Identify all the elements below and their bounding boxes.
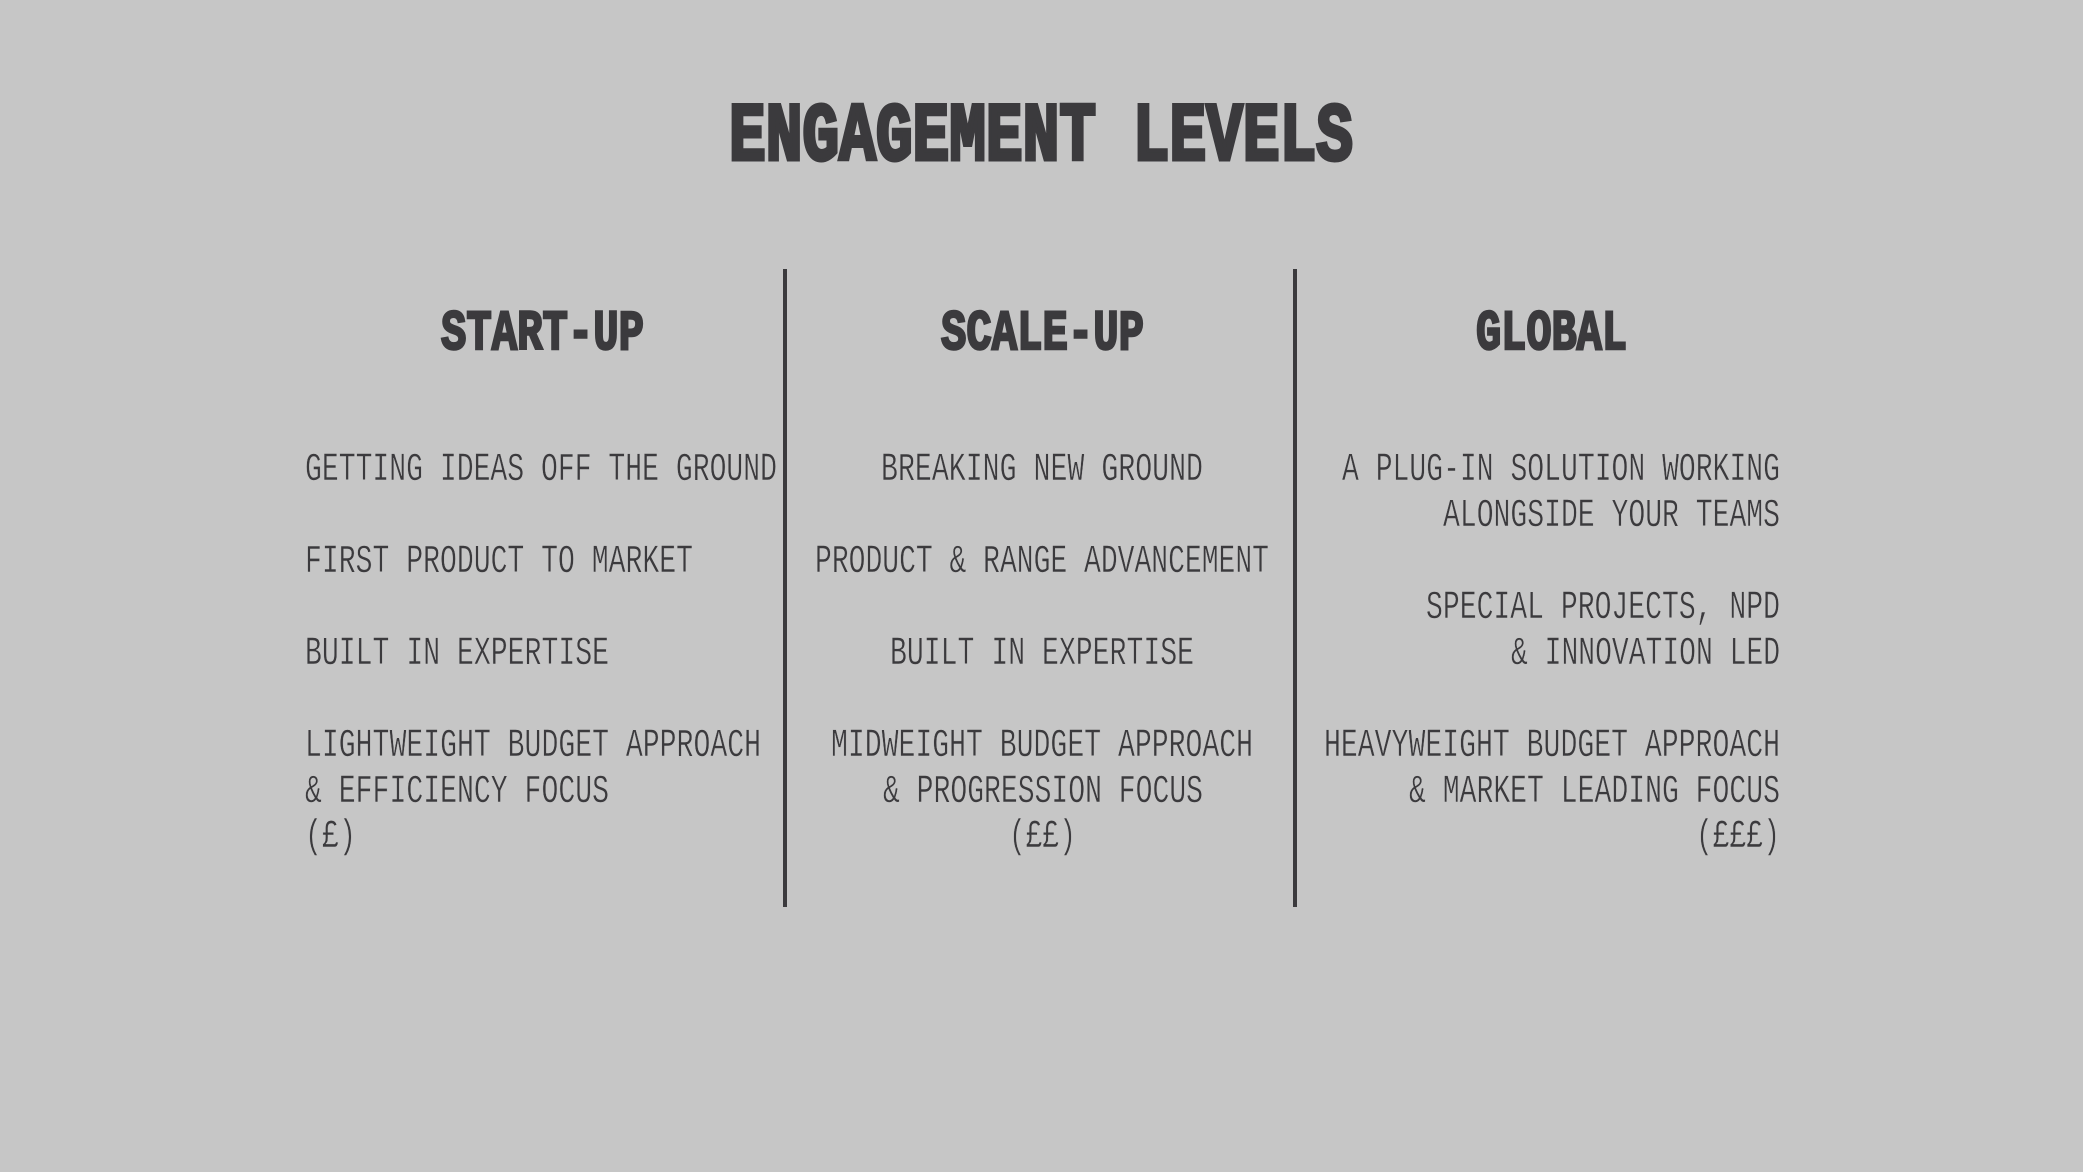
panel: scale-up xyxy=(815,303,1269,860)
divider: left xyxy=(783,269,787,907)
heading: global: GLOBAL xyxy=(1476,303,1627,367)
panel: global xyxy=(1324,303,1780,860)
text: breaking new ground: BREAKING NEW GROUND xyxy=(881,448,1203,493)
text: lightweight budget approach: LIGHTWEIGHT BUDGET APPROACH xyxy=(305,724,761,769)
text: midweight budget approach: MIDWEIGHT BUDGET APPROACH xyxy=(831,724,1253,769)
text: lightweight budget approach xyxy=(305,724,761,860)
text: built in expertise: BUILT IN EXPERTISE xyxy=(305,632,609,677)
text: heavyweight budget approach: (£££) xyxy=(1696,815,1780,860)
divider: right xyxy=(1293,269,1297,907)
text: getting ideas off the ground: GETTING IDEAS OFF THE GROUND xyxy=(305,448,777,493)
text: heavyweight budget approach: HEAVYWEIGHT BUDGET APPROACH xyxy=(1324,724,1780,769)
text: lightweight budget approach: & EFFICIENCY FOCUS xyxy=(305,770,609,815)
text: built in expertise: BUILT IN EXPERTISE xyxy=(890,632,1194,677)
text: plug-in solution: ALONGSIDE YOUR TEAMS xyxy=(1443,494,1780,539)
text: heavyweight budget approach: & MARKET LEADING FOCUS xyxy=(1409,770,1780,815)
text: midweight budget approach: (££) xyxy=(1009,815,1076,860)
text: midweight budget approach: & PROGRESSION FOCUS xyxy=(883,770,1203,815)
text: midweight budget approach xyxy=(831,724,1253,860)
title: ENGAGEMENT LEVELS xyxy=(729,90,1353,184)
text: plug-in solution: A PLUG-IN SOLUTION WORKING xyxy=(1342,448,1780,493)
text: plug-in solution xyxy=(1342,448,1780,539)
text: first product to market: FIRST PRODUCT TO MARKET xyxy=(305,540,693,585)
text: lightweight budget approach: (£) xyxy=(305,815,356,860)
panel: start-up xyxy=(305,303,777,860)
heading: start-up: START-UP xyxy=(441,303,644,367)
text: heavyweight budget approach xyxy=(1324,724,1780,860)
text: special projects xyxy=(1426,586,1780,677)
heading: scale-up: SCALE-UP xyxy=(941,303,1144,367)
text: special projects: SPECIAL PROJECTS, NPD xyxy=(1426,586,1780,631)
text: product and range advancement: PRODUCT & RANGE ADVANCEMENT xyxy=(815,540,1269,585)
text: special projects: & INNOVATION LED xyxy=(1511,632,1780,677)
